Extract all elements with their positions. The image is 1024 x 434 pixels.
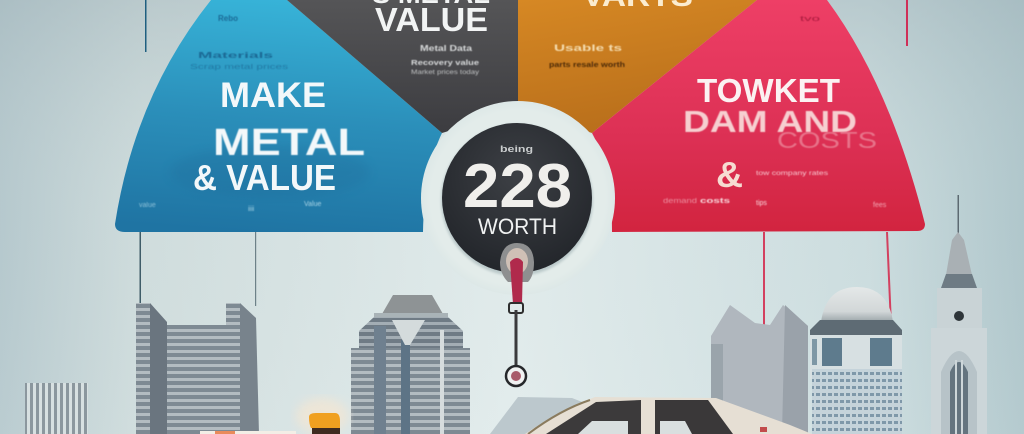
badge number: 228 xyxy=(463,152,572,221)
center halo xyxy=(421,101,615,295)
building: spired tower xyxy=(931,195,987,434)
fine print: blue panel: iiii xyxy=(248,206,255,213)
building: octagon crown tower xyxy=(351,295,470,434)
panel: parts xyxy=(518,0,757,133)
fine print: orange panel xyxy=(549,43,625,69)
heading: towket damand: & xyxy=(716,154,743,195)
fine print: dark panel: Market prices today xyxy=(411,69,480,76)
panel: towing market demand xyxy=(592,0,925,232)
panel: metal value xyxy=(287,0,518,133)
heading: make metal value xyxy=(193,76,365,198)
badge caption: WORTH xyxy=(478,214,557,239)
heading: towket damand: COSTS xyxy=(777,127,877,153)
fine print: red panel: tvo xyxy=(800,16,820,23)
building: small left block xyxy=(25,383,88,434)
fine print: blue panel: Rebo xyxy=(218,14,238,23)
building: low distant dome xyxy=(490,397,590,434)
fine print: dark panel: Metal Data xyxy=(420,44,473,53)
fine print: red panel: tips xyxy=(756,200,767,207)
heading: make metal value: METAL xyxy=(213,122,365,164)
fine print: blue panel xyxy=(139,14,321,213)
fine print: blue panel: Scrap metal prices xyxy=(190,64,289,71)
fine print: dark panel xyxy=(411,44,480,76)
fine print: red panel: costs xyxy=(700,196,730,205)
heading: towket damand xyxy=(683,72,877,195)
gauge pointer xyxy=(500,243,534,386)
fine print: blue panel: Materials xyxy=(198,51,274,60)
gauge badge xyxy=(441,123,593,276)
badge label: being xyxy=(500,144,533,154)
building: domed tower xyxy=(810,287,902,434)
tow truck with amber beacon xyxy=(200,398,348,434)
towed car xyxy=(525,397,812,434)
fine print: blue panel: value xyxy=(139,202,156,209)
fine print: red panel: fees xyxy=(873,202,887,209)
fine print: red panel xyxy=(663,16,887,209)
connector lines above the panels xyxy=(145,0,908,52)
heading: make metal value: & VALUE xyxy=(193,157,336,198)
building: twin tower xyxy=(136,303,259,434)
heading: metal value: VALUE xyxy=(375,1,488,38)
heading: towket damand: TOWKET xyxy=(697,72,840,109)
fine print: dark panel: Recovery value xyxy=(411,58,479,67)
fine print: orange panel: parts resale worth xyxy=(549,60,625,69)
fine print: red panel: tow company rates xyxy=(756,170,829,177)
building: notched block xyxy=(711,305,808,434)
connector lines below the panels xyxy=(140,232,891,326)
heading: make metal value: MAKE xyxy=(220,76,326,115)
fine print: red panel: demand xyxy=(663,198,697,205)
fine print: blue panel: Value xyxy=(304,201,321,208)
panel: make metal & value xyxy=(115,0,442,232)
fine print: orange panel: Usable ts xyxy=(554,43,622,53)
heading: towket damand: DAM AND xyxy=(683,104,857,139)
